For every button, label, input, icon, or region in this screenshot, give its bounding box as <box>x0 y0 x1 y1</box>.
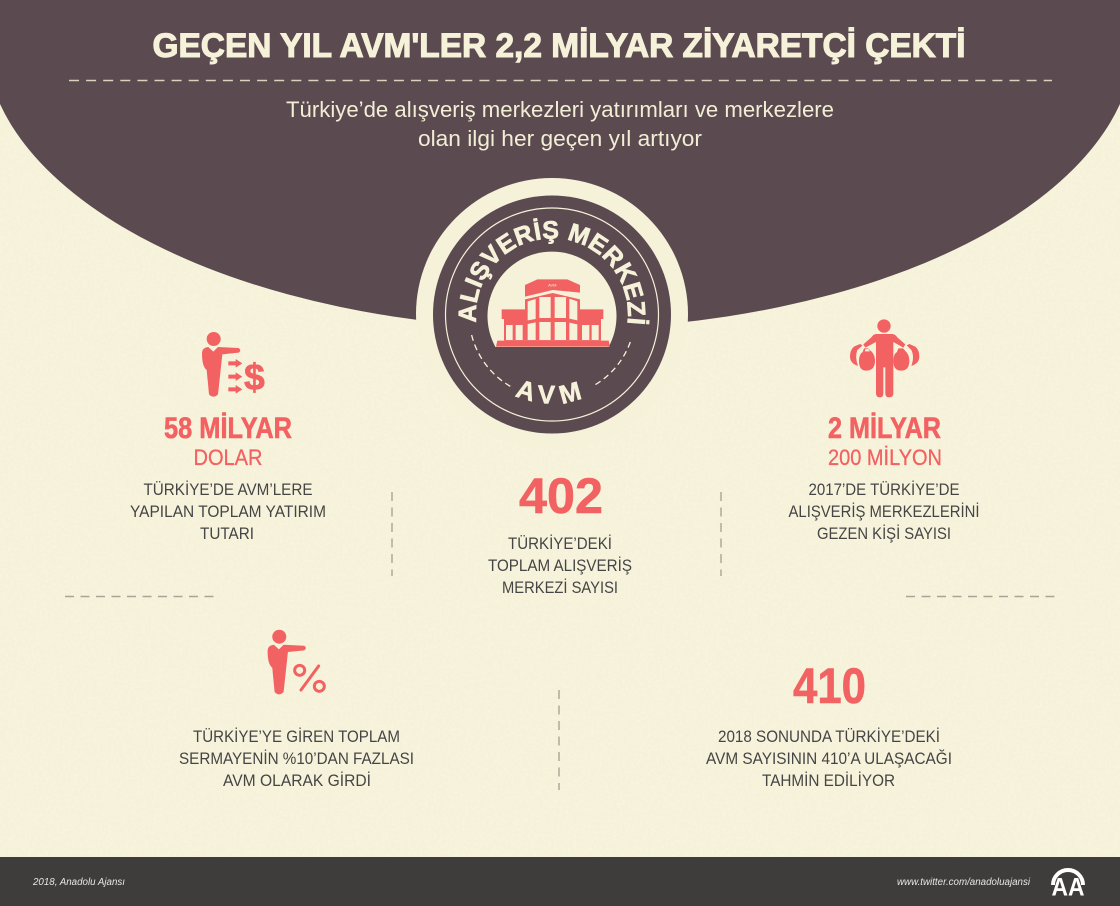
icon: person with percent <box>268 630 324 694</box>
credit: 2018, Anadolu Ajansı <box>32 877 125 888</box>
unit: DOLAR <box>194 445 262 470</box>
subtitle: olan ilgi her geçen yıl artıyor <box>418 126 702 151</box>
icon: AA logo: AA <box>1052 874 1084 902</box>
stat: yüzde 10 <box>179 630 414 790</box>
description: ALIŞVERİŞ MERKEZLERİNİ <box>788 502 980 521</box>
description: SERMAYENİN %10’DAN FAZLASI <box>179 749 414 768</box>
icon: person with dollar <box>202 332 265 398</box>
badge: alışveriş merkezi <box>416 178 688 434</box>
footer <box>0 857 1120 906</box>
description <box>179 727 414 790</box>
description <box>488 534 632 597</box>
description: TÜRKİYE’DEKİ <box>508 534 612 553</box>
description <box>706 727 952 790</box>
title: GEÇEN YIL AVM'LER 2,2 MİLYAR ZİYARETÇİ ÇEKTİ <box>152 27 966 65</box>
description: MERKEZİ SAYISI <box>502 578 618 597</box>
description: TUTARI <box>200 524 254 543</box>
description <box>130 480 326 543</box>
description: YAPILAN TOPLAM YATIRIM <box>130 502 326 521</box>
value: 410 <box>793 658 866 714</box>
icon: shopper with bags <box>850 319 919 397</box>
stat: 410 <box>706 658 952 790</box>
stat: 58 milyar dolar <box>130 332 326 543</box>
description: TOPLAM ALIŞVERİŞ <box>488 556 632 575</box>
description: GEZEN KİŞİ SAYISI <box>817 524 951 543</box>
description: TÜRKİYE’YE GİREN TOPLAM <box>193 727 400 746</box>
subtitle <box>286 97 834 151</box>
badge label avm: AVM <box>514 380 582 404</box>
value: 58 MİLYAR <box>164 412 292 445</box>
description: 2018 SONUNDA TÜRKİYE’DEKİ <box>718 727 940 746</box>
unit: 200 MİLYON <box>828 445 942 470</box>
value: 402 <box>519 468 603 524</box>
icon: mall building <box>496 279 610 347</box>
twitter url: www.twitter.com/anadoluajansi <box>897 877 1031 888</box>
description: TÜRKİYE’DE AVM’LERE <box>144 480 312 499</box>
description <box>788 480 980 543</box>
header dark shape <box>0 0 1120 329</box>
badge heading: ALIŞVERİŞ MERKEZİ <box>458 218 650 324</box>
description: TAHMİN EDİLİYOR <box>762 771 895 790</box>
stat: 2 milyar 200 milyon <box>788 319 980 543</box>
stat: 402 <box>488 468 632 597</box>
description: 2017’DE TÜRKİYE’DE <box>808 480 960 499</box>
description: AVM SAYISININ 410’A ULAŞACAĞI <box>706 749 952 768</box>
subtitle: Türkiye’de alışveriş merkezleri yatırımları ve merkezlere <box>286 97 834 122</box>
icon: mall building: AVM <box>548 283 557 288</box>
description: AVM OLARAK GİRDİ <box>223 771 371 790</box>
value: 2 MİLYAR <box>828 412 941 445</box>
icon: person with dollar: $ <box>244 356 265 398</box>
